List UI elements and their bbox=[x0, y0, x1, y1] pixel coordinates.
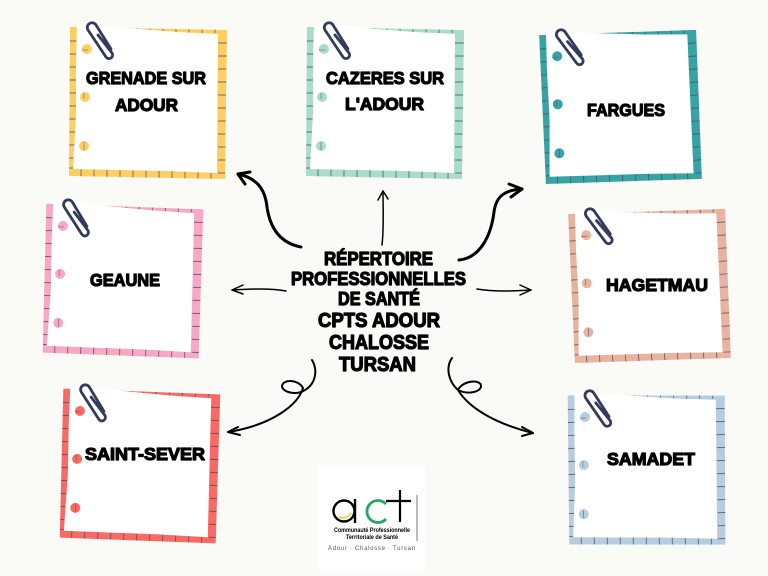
panel: Cazeres sur l'Adour: CAZERES SUR bbox=[326, 68, 444, 88]
title bbox=[291, 248, 466, 376]
icon: letter c bbox=[367, 501, 386, 522]
title: CPTS ADOUR bbox=[318, 310, 441, 332]
title: PROFESSIONNELLES bbox=[291, 269, 466, 289]
panel: Cazeres sur l'Adour bbox=[306, 23, 464, 179]
panel: Samadet bbox=[567, 388, 727, 547]
panel: Fargues bbox=[538, 23, 704, 187]
arrow: to Geaune bbox=[232, 285, 286, 294]
panel: Grenade sur Adour: GRENADE SUR bbox=[86, 68, 206, 88]
panel: Geaune: GEAUNE bbox=[90, 270, 160, 290]
divider line bbox=[416, 495, 418, 541]
arrow: to Saint-Sever bbox=[228, 360, 315, 435]
title: CHALOSSE bbox=[329, 332, 429, 354]
logo caption: Communauté Professionnelle bbox=[334, 528, 411, 534]
panel: Geaune bbox=[43, 199, 203, 358]
arrow: to Fargues bbox=[459, 184, 522, 260]
title: RÉPERTOIRE bbox=[324, 248, 433, 269]
panel: Hagetmau bbox=[567, 202, 733, 366]
arrow: to Cazeres sur l'Adour bbox=[378, 191, 388, 245]
logo: ACT bbox=[318, 465, 425, 571]
panel: Cazeres sur l'Adour: L'ADOUR bbox=[345, 94, 424, 114]
panel: Saint-Sever bbox=[60, 384, 220, 543]
panel: Fargues: FARGUES bbox=[587, 100, 665, 120]
icon: letter t bbox=[386, 490, 411, 522]
panel: Hagetmau: HAGETMAU bbox=[606, 275, 708, 295]
arrow: to Hagetmau bbox=[477, 285, 531, 295]
logo caption bbox=[328, 528, 415, 552]
panel: Saint-Sever: SAINT-SEVER bbox=[85, 444, 205, 464]
icon: letter a bbox=[334, 499, 355, 523]
title: TURSAN bbox=[339, 354, 416, 376]
arrow: to Samadet bbox=[448, 358, 533, 436]
logo caption: Territoriale de Santé bbox=[346, 535, 399, 541]
arrow: to Grenade sur Adour bbox=[238, 172, 301, 247]
panel: Grenade sur Adour bbox=[69, 23, 227, 179]
panel: Samadet: SAMADET bbox=[607, 449, 695, 469]
panel: Grenade sur Adour: ADOUR bbox=[115, 95, 178, 115]
logo caption: Adour · Chalosse · Tursan bbox=[328, 546, 415, 552]
title: DE SANTÉ bbox=[338, 288, 420, 309]
